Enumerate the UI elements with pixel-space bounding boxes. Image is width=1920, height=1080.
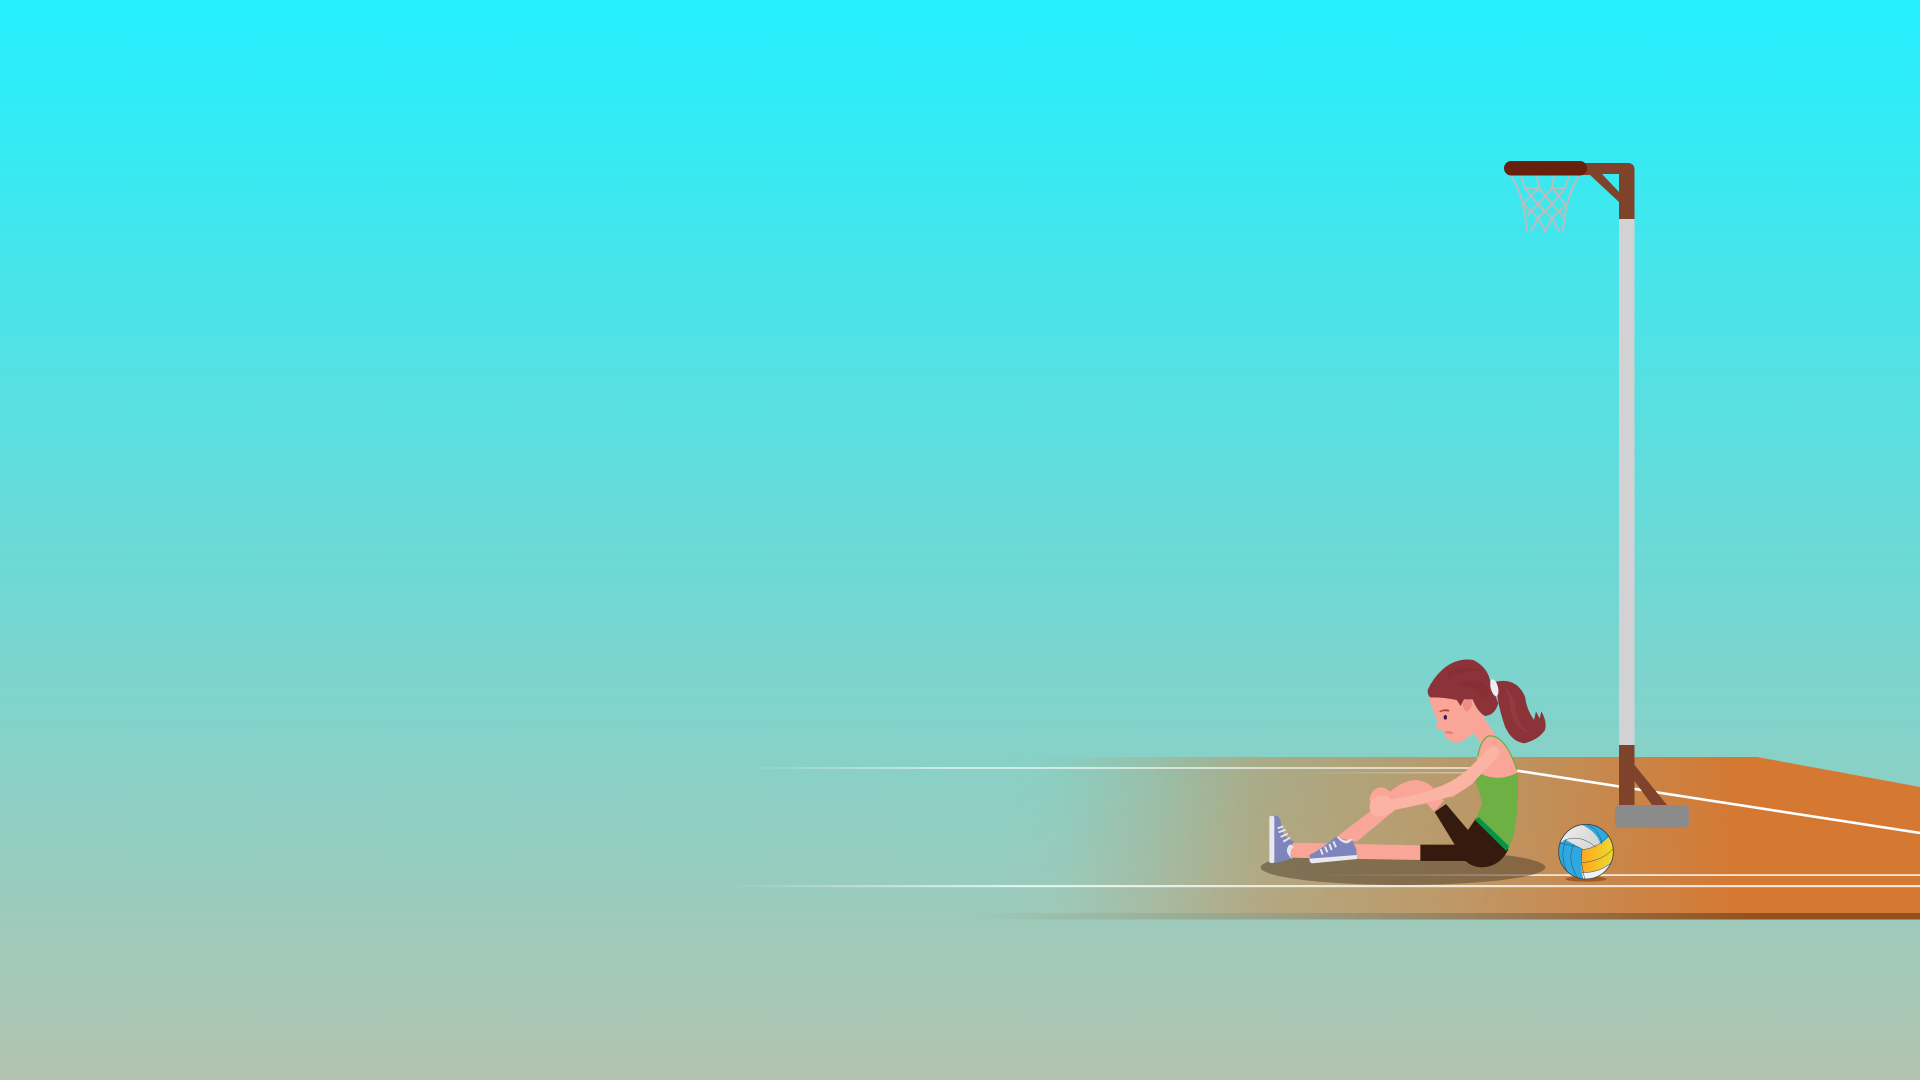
post upper arm <box>1580 163 1634 219</box>
ball panels <box>1559 824 1613 879</box>
far forearm <box>1430 773 1473 799</box>
shorts <box>1435 804 1508 867</box>
hair <box>1428 660 1498 716</box>
hoop rim <box>1504 161 1587 176</box>
floor shadow <box>1261 850 1545 885</box>
near shin and knee <box>1336 780 1444 842</box>
tank top <box>1475 736 1518 851</box>
ear <box>1463 699 1472 712</box>
court line: inner line <box>1310 874 1920 876</box>
court surface <box>1000 757 1920 913</box>
near hand <box>1370 796 1397 817</box>
court front edge <box>960 913 1920 920</box>
court line: near sideline <box>725 885 1920 887</box>
ball outline <box>1559 824 1613 879</box>
post lower bracket <box>1619 745 1667 805</box>
far leg <box>1288 843 1422 860</box>
far hand <box>1369 787 1393 805</box>
far foot shoe <box>1269 816 1294 863</box>
eye <box>1444 715 1447 720</box>
volleyball <box>1557 822 1617 882</box>
face <box>1429 683 1483 743</box>
hair tie <box>1489 678 1500 697</box>
netball goal post <box>1504 161 1689 828</box>
panel: court floor <box>725 757 1920 920</box>
court line: faint far line <box>1300 772 1465 774</box>
near shoe <box>1309 837 1357 863</box>
court line: far sideline <box>740 767 1470 769</box>
near arm <box>1387 747 1499 809</box>
far thigh in black shorts <box>1420 845 1467 861</box>
head <box>1428 660 1546 743</box>
mouth <box>1445 731 1453 734</box>
post base <box>1615 805 1689 828</box>
torso skin and neck <box>1470 715 1518 778</box>
court line: diagonal <box>1516 770 1920 833</box>
ponytail <box>1496 681 1546 743</box>
net <box>1511 176 1579 231</box>
ponytail highlight <box>1503 685 1532 733</box>
figure: injured girl sitting on floor <box>1261 660 1546 885</box>
ball shadow <box>1565 876 1607 882</box>
eyebrow <box>1439 709 1449 712</box>
hair highlight <box>1447 668 1488 700</box>
post pole <box>1619 219 1634 745</box>
